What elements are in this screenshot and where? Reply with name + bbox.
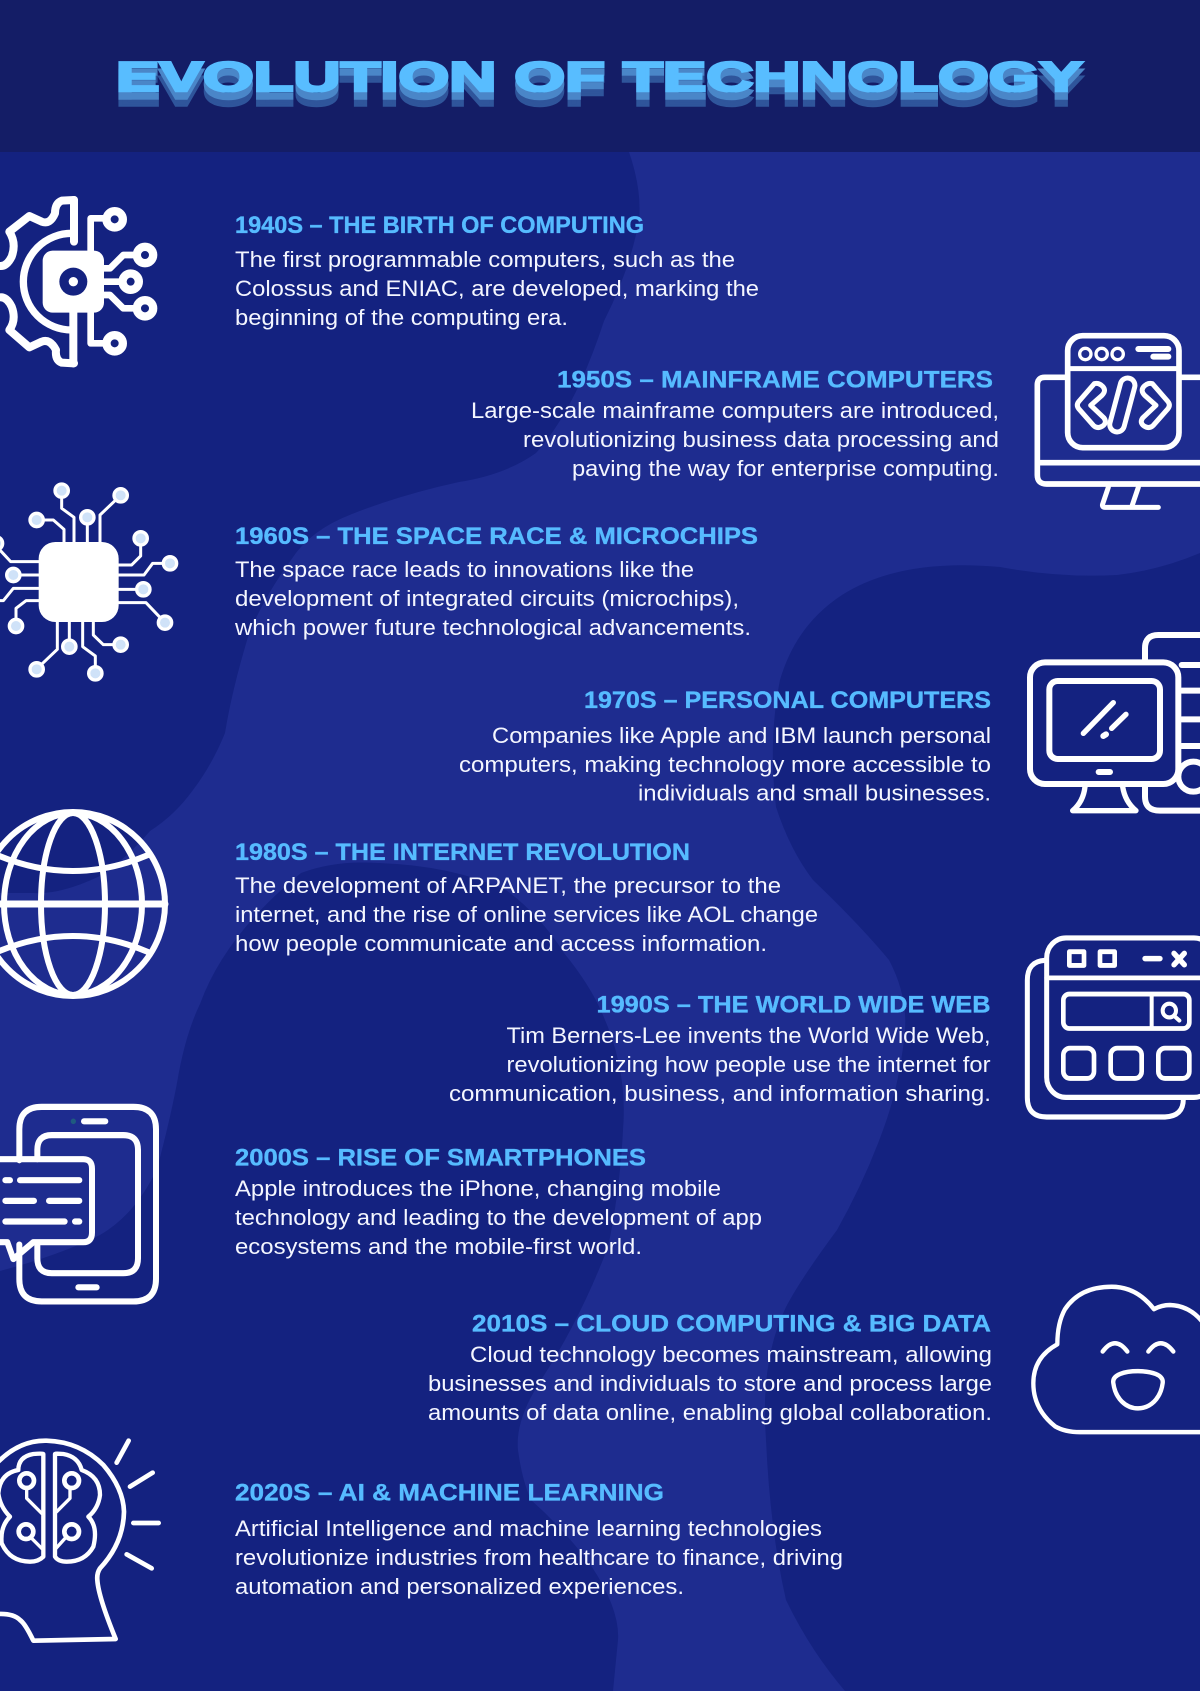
section: 1960s: development of integrated circuits (microchips),	[235, 586, 739, 611]
section: 2020s: Artificial Intelligence and machine learning technologies	[235, 1516, 822, 1541]
icon: code window on monitor	[1037, 336, 1200, 507]
section: 1940s: Colossus and ENIAC, are developed, marking the	[235, 276, 759, 301]
section: 2020s: revolutionize industries from healthcare to finance, driving	[235, 1545, 843, 1570]
section: 1980s	[235, 839, 818, 956]
section: 1940s: The first programmable computers, such as the	[235, 247, 735, 272]
section: 1990s: revolutionizing how people use the internet for	[506, 1052, 990, 1077]
section: 1990s: 1990S – THE WORLD WIDE WEB	[596, 992, 990, 1019]
section: 1970s: 1970S – PERSONAL COMPUTERS	[584, 687, 991, 714]
section: 1970s	[459, 687, 991, 806]
section: 1960s	[234, 523, 758, 640]
section: 1990s: communication, business, and information sharing.	[449, 1081, 991, 1106]
title	[116, 53, 1083, 114]
icon: globe	[0, 812, 165, 996]
section: 1980s: how people communicate and access information.	[235, 931, 767, 956]
section: 2000s: 2000S – RISE OF SMARTPHONES	[235, 1145, 646, 1172]
section: 1980s: 1980S – THE INTERNET REVOLUTION	[235, 839, 690, 866]
icon: desktop computer	[1030, 635, 1200, 811]
icon: head with circuit brain	[0, 1441, 159, 1641]
section: 2010s: amounts of data online, enabling global collaboration.	[428, 1400, 992, 1425]
section: 1940s: beginning of the computing era.	[235, 305, 568, 330]
header band	[0, 0, 1200, 152]
section: 2010s	[428, 1311, 992, 1425]
section: 2010s: Cloud technology becomes mainstream, allowing	[470, 1342, 992, 1367]
title: EVOLUTION OF TECHNOLOGY	[116, 68, 1083, 114]
section: 1940s: 1940S – THE BIRTH OF COMPUTING	[235, 212, 644, 239]
section: 2020s: 2020S – AI & MACHINE LEARNING	[235, 1480, 664, 1507]
section: 2020s	[235, 1480, 843, 1599]
section: 1950s: Large-scale mainframe computers are introduced,	[471, 398, 999, 423]
icon: gear with circuit	[0, 200, 153, 363]
section: 1990s	[449, 992, 991, 1106]
section: 2020s: automation and personalized experiences.	[235, 1574, 684, 1599]
section: 1960s: 1960S – THE SPACE RACE & MICROCHIPS	[235, 523, 758, 550]
icon: microchip	[0, 484, 177, 680]
section: 1950s: revolutionizing business data processing and	[523, 427, 999, 452]
section: 1970s: computers, making technology more accessible to	[459, 752, 991, 777]
section: 2010s: 2010S – CLOUD COMPUTING & BIG DATA	[472, 1311, 991, 1338]
section: 2010s: businesses and individuals to store and process large	[428, 1371, 992, 1396]
section: 2000s	[235, 1145, 762, 1259]
title: EVOLUTION OF TECHNOLOGY	[116, 60, 1083, 108]
section: 1940s	[235, 212, 759, 330]
section: 1960s: which power future technological advancements.	[234, 615, 751, 640]
section: 1950s: paving the way for enterprise computing.	[572, 456, 999, 481]
section: 1970s: individuals and small businesses.	[638, 780, 991, 806]
section: 1960s: The space race leads to innovations like the	[235, 557, 694, 582]
icon: browser windows	[1027, 938, 1200, 1117]
section: 2000s: Apple introduces the iPhone, changing mobile	[235, 1176, 721, 1201]
icon: smiling cloud	[1033, 1287, 1200, 1432]
section: 2000s: technology and leading to the development of app	[235, 1205, 762, 1230]
section: 1950s: 1950S – MAINFRAME COMPUTERS	[557, 366, 993, 394]
icon: smartphone with chat bubble	[0, 1107, 156, 1301]
section: 1980s: internet, and the rise of online services like AOL change	[235, 902, 818, 927]
section: 1950s	[471, 366, 999, 481]
title: EVOLUTION OF TECHNOLOGY	[116, 53, 1083, 100]
section: 1990s: Tim Berners-Lee invents the World Wide Web,	[506, 1023, 990, 1048]
section: 1970s: Companies like Apple and IBM launch personal	[492, 723, 991, 748]
section: 1980s: The development of ARPANET, the precursor to the	[235, 873, 781, 898]
section: 2000s: ecosystems and the mobile-first world.	[235, 1234, 642, 1259]
